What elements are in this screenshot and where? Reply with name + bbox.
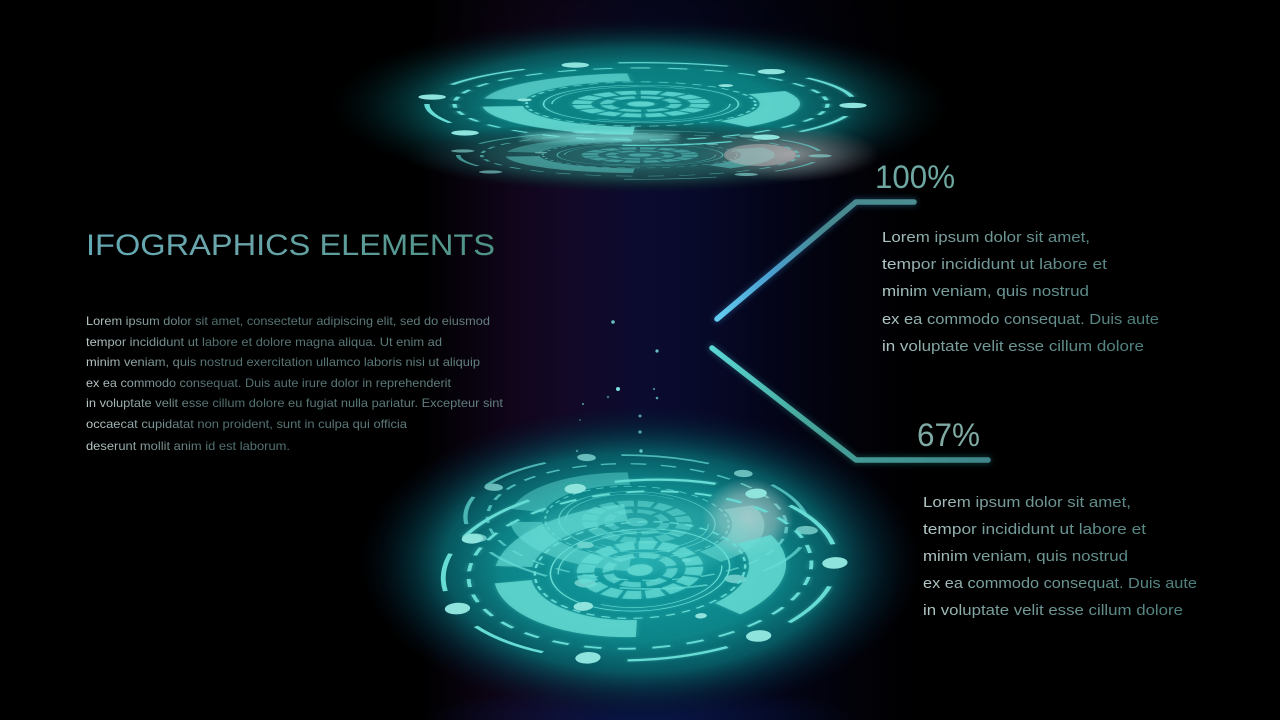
left body text: Lorem ipsum dolor sit amet, consectetur adipiscing elit, sed do eiusmod [86,314,490,328]
lower right text: Lorem ipsum dolor sit amet, [923,494,1131,511]
value: 67%: 67% [917,417,980,453]
lower right text: tempor incididunt ut labore et [923,521,1147,538]
lower right text: ex ea commodo consequat. Duis aute [923,575,1197,592]
title: IFOGRAPHICS ELEMENTS [86,229,495,262]
upper right text: in voluptate velit esse cillum dolore [882,338,1144,355]
upper right text: minim veniam, quis nostrud [882,283,1089,300]
left body text: ex ea commodo consequat. Duis aute irure dolor in reprehenderit [86,376,452,390]
hologram disc: bottom [360,405,920,719]
left body text: in voluptate velit esse cillum dolore eu fugiat nulla pariatur. Excepteur sint [86,396,504,410]
hologram disc: top [330,18,950,194]
left body text: tempor incididunt ut labore et dolore magna aliqua. Ut enim ad [86,335,442,349]
upper right text: tempor incididunt ut labore et [882,256,1108,273]
upper right text: ex ea commodo consequat. Duis aute [882,311,1159,328]
particles [576,320,659,453]
left body text: occaecat cupidatat non proident, sunt in culpa qui officia [86,417,407,431]
left body text: minim veniam, quis nostrud exercitation ullamco laboris nisi ut aliquip [86,355,480,369]
connector line: 67% [712,348,988,460]
value: 100%: 100% [875,159,955,195]
connector line: 100% [717,202,914,319]
lower right text: minim veniam, quis nostrud [923,548,1128,565]
lower right text [923,494,1197,619]
left body text [86,314,504,453]
lower right text: in voluptate velit esse cillum dolore [923,602,1183,619]
upper right text: Lorem ipsum dolor sit amet, [882,229,1090,246]
upper right text [882,229,1159,355]
left body text: deserunt mollit anim id est laborum. [86,439,290,453]
